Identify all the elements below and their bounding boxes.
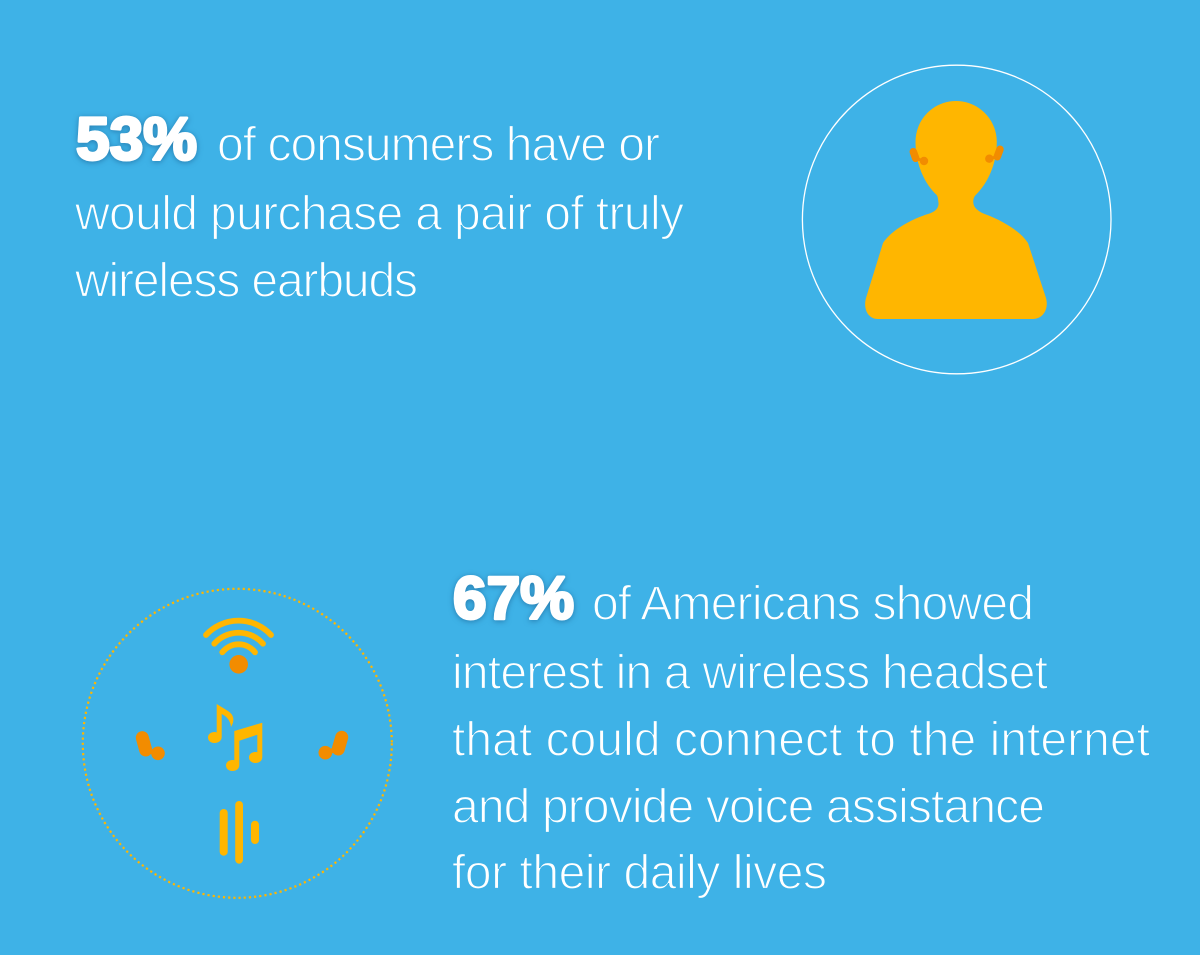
text line 5: for their daily lives	[452, 846, 827, 900]
dotted circle	[83, 589, 392, 898]
icon: right earbud	[318, 737, 342, 760]
icon group: connected earbuds features	[83, 589, 392, 898]
left earbud	[913, 152, 928, 165]
text line 1: of Americans showed	[592, 578, 1034, 630]
text block: 53% of consumers	[74, 106, 684, 308]
right earbud	[985, 149, 1000, 163]
text line 2: would purchase a pair of truly	[74, 188, 684, 240]
statistic: 53%: 53%	[76, 106, 197, 172]
icon: wifi	[206, 621, 271, 674]
text line 2: interest in a wireless headset	[452, 646, 1048, 700]
small note	[208, 704, 233, 743]
icon: music notes	[208, 704, 262, 771]
person silhouette	[865, 101, 1047, 319]
icon: person wearing earbuds	[802, 65, 1111, 374]
text line 1: of consumers have or	[217, 118, 660, 172]
icon: voice waveform	[220, 801, 259, 864]
statistic: 67%: 67%	[453, 564, 574, 632]
text line 3: that could connect to the internet	[452, 714, 1150, 766]
text block: 67% of Americans	[452, 564, 1150, 900]
text line 3: wireless earbuds	[74, 254, 418, 308]
icon: left earbud	[142, 738, 165, 760]
large note	[226, 723, 262, 771]
text line 4: and provide voice assistance	[452, 780, 1045, 834]
white outline circle	[802, 65, 1111, 374]
